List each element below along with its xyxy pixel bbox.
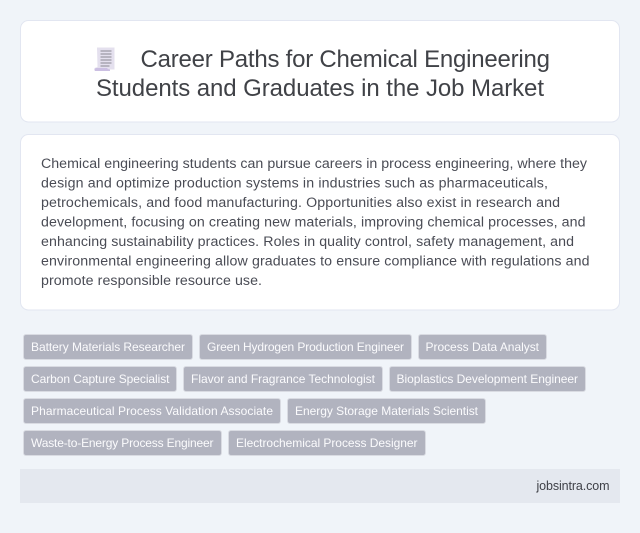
title: Students and Graduates in the Job Market — [96, 75, 544, 102]
panel: description — [20, 134, 620, 310]
tag: Flavor and Fragrance Technologist — [191, 372, 376, 386]
tag: Green Hydrogen Production Engineer — [207, 340, 404, 354]
panel: header — [20, 20, 620, 122]
text block: description: petrochemicals, and food manufacturing. Opportunities also exist in research and — [41, 195, 560, 211]
tag: Electrochemical Process Designer — [236, 436, 418, 450]
tags: career paths — [24, 334, 586, 456]
footer — [20, 469, 620, 503]
text block: description: promote responsible resource use. — [41, 273, 262, 289]
tag — [24, 430, 222, 456]
text block: description: environmental engineering allow graduates to ensure compliance with regulations and — [41, 254, 590, 270]
tag: Process Data Analyst — [426, 340, 540, 354]
tag: Pharmaceutical Process Validation Associate — [31, 404, 273, 418]
tag — [24, 398, 280, 424]
tag — [418, 334, 546, 360]
tag — [24, 366, 176, 392]
title — [96, 46, 550, 102]
tag: Carbon Capture Specialist — [31, 372, 170, 386]
tag — [228, 430, 426, 456]
tag — [24, 334, 192, 360]
text block: description: enhancing sustainability practices. Roles in quality control, safety management, and — [41, 234, 574, 250]
footer: jobsintra.com — [536, 479, 610, 493]
tag: Battery Materials Researcher — [31, 340, 185, 354]
tag: Waste-to-Energy Process Engineer — [31, 436, 214, 450]
text block: description: design and optimize production systems in industries such as pharmaceuticals, — [41, 176, 548, 192]
icon: paper scroll — [94, 48, 114, 71]
tag — [184, 366, 382, 392]
text block: description: Chemical engineering students can pursue careers in process engineering, where they — [41, 156, 588, 172]
tag — [390, 366, 586, 392]
tag: Bioplastics Development Engineer — [396, 372, 578, 386]
text block: description — [41, 156, 590, 289]
text block: description: development, focusing on creating new materials, improving chemical processes, and — [41, 214, 586, 230]
tag — [288, 398, 486, 424]
tag — [200, 334, 412, 360]
title: Career Paths for Chemical Engineering — [140, 46, 550, 73]
tag: Energy Storage Materials Scientist — [295, 404, 479, 418]
